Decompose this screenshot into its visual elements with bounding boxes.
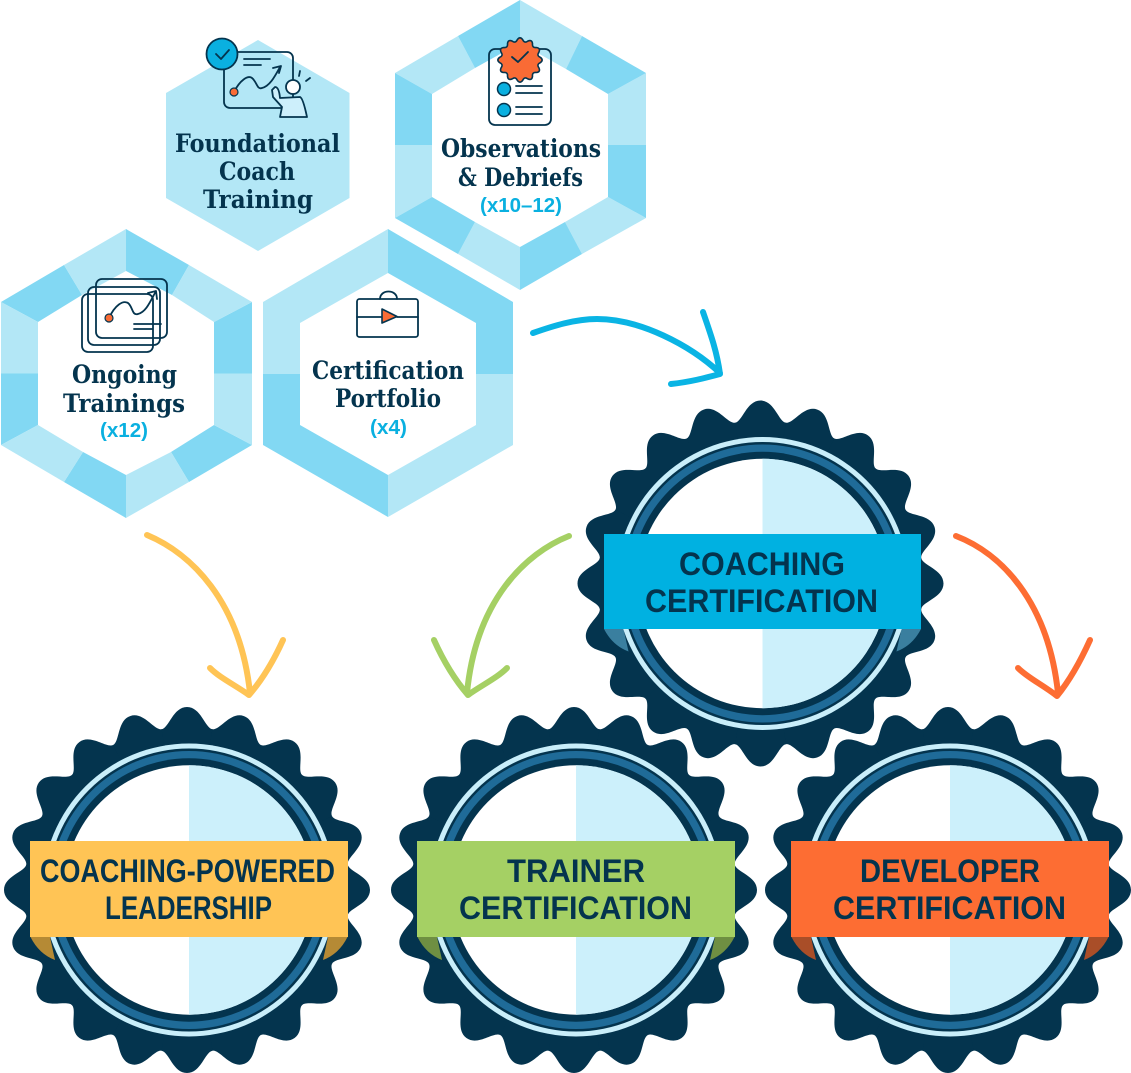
panel: Foundational Coach Training hexagon xyxy=(166,38,350,251)
banner: Developer Certification: DEVELOPER xyxy=(860,853,1040,889)
heading: Observations and Debriefs: Observations xyxy=(441,134,601,163)
panel: Certification Portfolio hexagon xyxy=(263,229,513,517)
arrow: hexagons to coaching-powered leadership xyxy=(147,535,283,695)
heading: Foundational Coach Training: Foundational xyxy=(175,129,340,158)
heading: Foundational Coach Training: Training xyxy=(203,185,313,214)
icon: stacked slides with chart xyxy=(82,279,167,352)
arrow: hexagons to coaching certification xyxy=(533,312,720,384)
panel: Observations and Debriefs hexagon xyxy=(395,0,646,290)
banner: Trainer Certification xyxy=(417,841,735,937)
badge: Developer Certification xyxy=(765,707,1131,1073)
badge: Coaching Certification xyxy=(578,400,944,766)
heading: Foundational Coach Training xyxy=(175,129,340,214)
arrow: coaching certification to developer certification xyxy=(956,536,1090,696)
badge: Trainer Certification xyxy=(391,707,757,1073)
heading: Observations and Debriefs: & Debriefs xyxy=(458,163,583,192)
badge: Coaching-Powered Leadership xyxy=(4,707,370,1073)
count label: x12: (x12) xyxy=(100,420,148,442)
banner: Coaching Certification xyxy=(604,534,921,629)
banner: Trainer Certification: TRAINER xyxy=(507,853,645,889)
count label: x10-12: (x10–12) xyxy=(480,195,562,217)
banner: Coaching-Powered Leadership xyxy=(30,841,348,937)
heading: Observations and Debriefs xyxy=(441,134,601,192)
heading: Certification Portfolio: Certification xyxy=(312,356,464,385)
icon: checklist with badge xyxy=(489,38,551,125)
panel: Ongoing Trainings hexagon xyxy=(1,229,252,518)
banner: Trainer Certification: CERTIFICATION xyxy=(459,890,692,926)
heading: Certification Portfolio xyxy=(312,356,464,413)
banner: Coaching Certification: COACHING xyxy=(679,546,845,582)
heading: Ongoing Trainings xyxy=(63,360,185,418)
heading: Certification Portfolio: Portfolio xyxy=(335,384,441,413)
icon: presentation board with presenter xyxy=(206,38,310,117)
banner: Coaching-Powered Leadership: LEADERSHIP xyxy=(105,890,272,926)
heading: Ongoing Trainings: Ongoing xyxy=(72,360,177,389)
icon: briefcase with play button xyxy=(357,292,418,337)
count label: x4: (x4) xyxy=(370,417,407,439)
banner: Developer Certification: CERTIFICATION xyxy=(833,890,1066,926)
banner: Developer Certification xyxy=(791,841,1109,937)
heading: Ongoing Trainings: Trainings xyxy=(63,389,185,418)
banner: Coaching Certification: CERTIFICATION xyxy=(645,583,878,619)
heading: Foundational Coach Training: Coach xyxy=(219,157,295,186)
banner: Coaching-Powered Leadership: COACHING-POWERED xyxy=(40,853,335,889)
arrow: coaching certification to trainer certification xyxy=(434,536,569,695)
